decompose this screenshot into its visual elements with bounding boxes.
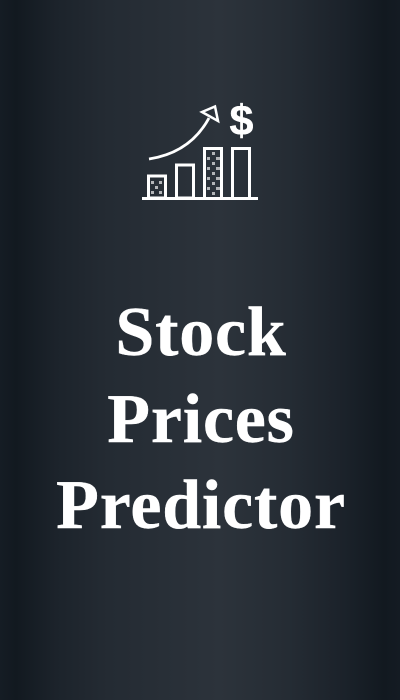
title: Predictor [56,467,346,544]
title: Stock [115,294,287,371]
title [56,294,346,544]
title: Prices [107,380,295,458]
bars [148,148,250,198]
dollar sign: $ [230,97,254,145]
baseline [142,197,258,200]
trend arrow [149,106,218,159]
bar texture dots [151,152,220,195]
